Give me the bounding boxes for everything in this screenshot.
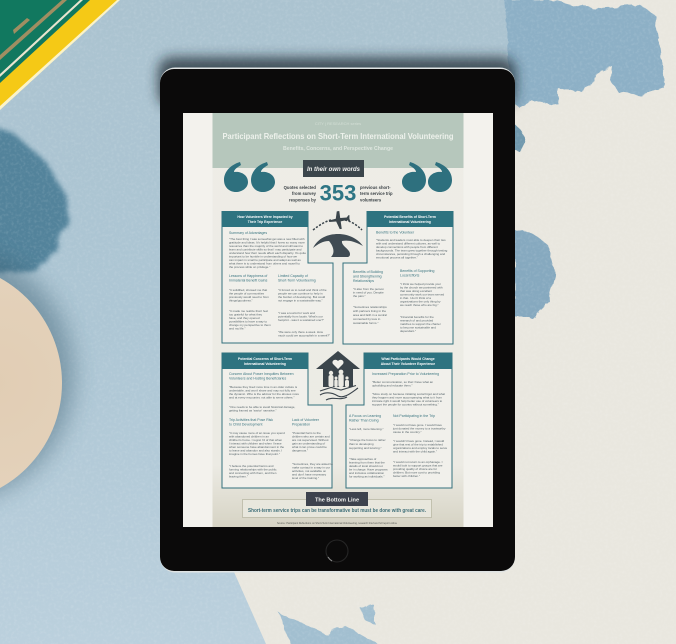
quotes: preparation: support the people for country without something." — [372, 402, 439, 406]
quotes: not participating: "I would not have gone. I would have — [393, 423, 442, 427]
plate shadow — [0, 249, 74, 501]
quote: advantages: the process while on privilege." — [229, 265, 270, 269]
panel: what participants would change — [346, 353, 452, 488]
quotes: learning: "Less left, more listening." — [349, 427, 383, 431]
quote: benefits to volunteer: circumstances, persisting through a challenging and — [376, 252, 445, 256]
subheading: not participating: Not Participating in the Trip — [393, 414, 435, 418]
quotes: not participating: give that rest of the trip to established — [393, 442, 443, 446]
quotes: learning: for working as individuals." — [349, 474, 384, 478]
subheading: lessons: Immaterial Benefit Gains — [229, 278, 268, 282]
arch — [313, 234, 363, 257]
quotes: limited capacity: footprint - was it a sustained one?" — [278, 318, 324, 322]
right caption: previous short- — [360, 185, 391, 190]
quotes: learning: and inclusive collaboration — [349, 471, 385, 475]
eyebrow: CITY | RESEARCH series — [315, 121, 361, 126]
quotes: lessons: possibilities to have a way to — [229, 320, 267, 324]
subheading: power inequities: Concern About Power Inequities Between — [229, 372, 294, 376]
quotes: relationships: "Sometimes relationships — [353, 305, 387, 309]
quotes: activities harm: to leave and abandon and also stands. I — [229, 448, 282, 452]
quotes: local efforts: research of and provided — [400, 318, 434, 322]
quotes: lessons: "It made me realize that I feel — [229, 309, 268, 313]
quotes: not participating: providing quality of choice are for — [393, 467, 437, 471]
quotes: relationships: in need of you. Despite — [353, 290, 384, 294]
quotes: activities harm: forming relationships with the public — [229, 468, 277, 472]
quotes: limited capacity: the burden of developing. But could — [278, 295, 326, 299]
quotes: relationships: sustainable forms." — [353, 321, 378, 325]
open hand — [320, 386, 358, 400]
right caption: term service trip — [360, 191, 393, 196]
subheading: lack of preparation: Preparation — [292, 422, 310, 426]
quotes: not participating: better with children." — [393, 474, 420, 478]
right caption: volunteers — [360, 198, 382, 202]
callout: the bottom line — [242, 492, 432, 518]
subheading: limited capacity: Limited Capacity of — [278, 274, 308, 278]
callout text: Short-term service trips can be transformative but must be done with great care. — [248, 508, 427, 514]
quotes: local efforts: we reach those who are big." — [400, 303, 439, 307]
quote: advantages: learn and contribute skills so that I may participate and — [229, 248, 302, 252]
quotes: activities harm: I interact with children and when I leave — [229, 442, 282, 446]
quotes: local efforts: to become sustainable and — [400, 326, 436, 330]
quote: benefits to volunteer: with and understand different cultures, as well to — [376, 242, 440, 246]
quotes: local efforts: in that. I don't think of a — [400, 296, 431, 300]
quotes: activities harm: and connecting with them, and then — [229, 471, 277, 475]
flight path — [313, 220, 362, 230]
quotes: learning: "Take approaches of — [349, 457, 376, 461]
quotes: local efforts: dependant." — [400, 329, 416, 333]
subheading: learning: Rather Than Doing — [349, 418, 379, 422]
quotes: lack of preparation: children who are certain and — [292, 434, 330, 438]
quotes: activities harm: leaving them." — [229, 474, 248, 478]
ceramic plate — [0, 263, 62, 503]
quotes: not participating: would look to support groups that are — [393, 464, 443, 468]
quotes: activities harm: "It may cause more of an issue you spend — [229, 431, 285, 435]
label: in their own words: In their own words — [307, 167, 361, 173]
quotes: learning: details of local should not — [349, 464, 383, 468]
quotes: lack of preparation: dangerous." — [292, 448, 308, 452]
panel header: What Participants Would Change — [381, 357, 435, 361]
panel header — [222, 353, 308, 369]
main title: Participant Reflections on Short-Term International Volunteering — [222, 132, 454, 141]
background: cream paper area — [234, 0, 676, 644]
quote: benefits to volunteer: backgrounds. The team grew together through testing — [376, 248, 448, 252]
quotes: not participating: "I would not return to an orphanage. I — [393, 460, 443, 464]
quotes: lessons: too grateful for what they — [229, 312, 263, 316]
quotes: activities harm: imagine in the homes have that point." — [229, 452, 280, 456]
subheading: local efforts: Local Efforts — [400, 274, 420, 278]
quote: benefits to volunteer: "Students and leaders must able to deepen their ties — [376, 238, 446, 242]
panel header: International Volunteering — [389, 220, 431, 224]
quotes: lack of preparation: and don't have necessary — [292, 472, 327, 476]
quotes: limited capacity: "I was a tourist for work and — [278, 311, 315, 315]
quote: advantages: can impact in small to participate and adapt as well as — [229, 258, 301, 262]
quotes: activities harm: with abandoned children in an — [229, 434, 269, 438]
panel: potential benefits — [343, 211, 453, 344]
quotes: local efforts: matches to support the charter — [400, 322, 441, 326]
subheading: learning: A Focus on Learning — [349, 414, 381, 418]
panel header: Potential Benefits of Short-Term — [384, 215, 436, 219]
quotes: not participating: "I wouldn't have gone. Instead, I would — [393, 439, 445, 443]
quotes: lack of preparation: activities, not available on — [292, 469, 327, 473]
left caption: from survey — [292, 191, 317, 196]
quotes: relationships: "It also from the person — [353, 287, 384, 291]
icon: house with family and hand — [316, 351, 360, 400]
header band — [212, 113, 464, 168]
quotes: lessons: have, and they opened — [229, 316, 260, 320]
home button — [326, 540, 348, 562]
quotes: local efforts: that was doing excellent — [400, 289, 432, 293]
panel header: About Their Volunteer Experience — [381, 362, 435, 366]
quotes: learning: learning from them that the — [349, 460, 385, 464]
quotes: lessons: previously would need to from — [229, 295, 269, 299]
quotes: not participating: and interact with the child again." — [393, 450, 437, 454]
number 353: 353 — [320, 180, 356, 206]
quotes: lessons: things/goodness." — [229, 298, 253, 302]
quotes: lack of preparation: are not supervised. Without — [292, 438, 329, 442]
quotes: learning: be in charge. Have programs — [349, 468, 388, 472]
left caption: Quotes selected — [284, 185, 316, 190]
subheading: preparation: Increased Preparation Prior to Volunteering — [372, 372, 439, 376]
airplane — [328, 210, 351, 230]
label: in their own words — [303, 160, 364, 177]
quotes: activities harm: when someone have abandonment in the — [229, 445, 284, 449]
quotes: power inequities: undeniable, and won't share and may not fully see — [229, 388, 296, 392]
quotes: preparation: they happen and more accompanying what to it from — [372, 396, 442, 400]
quotes: local efforts: community work our team served — [400, 292, 445, 296]
quotes: learning: than to developing — [349, 442, 374, 446]
quotes: preparation: upbuilding and educate them." — [372, 384, 412, 388]
watercolour blotch: right small — [514, 124, 525, 152]
quotes: local efforts: by the church we partnered with — [400, 286, 443, 290]
quotes: learning: supporting and tutoring." — [349, 446, 382, 450]
quote: advantages: resources than the majority of the world and still want to — [229, 244, 303, 248]
quotes: power inequities: "Because they lived more time in an older culture is — [229, 385, 298, 389]
tablet — [160, 68, 515, 572]
quote: advantages: "The best thing I was somewhat get was a new filled with — [229, 237, 305, 241]
watercolour blotch: bottom — [278, 612, 385, 644]
quotes: not participating: organizations and employ locals to serve — [393, 446, 448, 450]
quotes: activities harm: "I believe the potential harms and — [229, 464, 274, 468]
watercolour blotch: left dark — [0, 124, 68, 272]
quotes: limited capacity: "We were only there a week. How — [278, 330, 324, 334]
quotes: not participating: cause in the country." — [393, 430, 422, 434]
survey statistic — [284, 180, 393, 206]
quotes: power inequities: and at every encounter, not able to serve others." — [229, 396, 294, 400]
subheading: activities harm: to Child Development — [229, 422, 262, 426]
roof and walls — [316, 351, 360, 387]
quote: benefits to volunteer: develop connections with people from different — [376, 245, 438, 249]
subheading: relationships: Benefits of Building — [353, 270, 383, 274]
subtitle: Benefits, Concerns, and Perspective Change — [283, 146, 393, 152]
quotes: preparation: "Better communication, so that I have what an — [372, 380, 433, 384]
panel header: Potential Concerns of Short-Term — [238, 357, 292, 361]
watercolour blotch: right mid — [514, 230, 556, 318]
quotes: lessons: the people of communities — [229, 292, 265, 296]
subheading: benefits to volunteer: Benefits to the Volunteer — [376, 230, 415, 234]
watercolour blotch: bottom small — [361, 606, 375, 624]
quotes: relationships: connected by love in — [353, 317, 381, 321]
icon: opening quote marks — [224, 162, 275, 192]
subheading: lessons: Lessons of Happiness of — [229, 274, 267, 278]
panel header — [367, 211, 453, 227]
subheading: lack of preparation: Lack of Volunteer — [292, 418, 320, 422]
quote: advantages: gratitude and ideas. It's helpful that I knew so many more — [229, 240, 305, 244]
quotes: lessons: "It solidified, showed me that — [229, 288, 267, 292]
icon: closing quote marks — [402, 162, 452, 192]
panel: potential concerns — [222, 353, 334, 488]
subheading: relationships: and Strengthening — [353, 274, 382, 278]
quotes: relationships: the pain." — [353, 294, 366, 298]
panel header — [222, 211, 308, 227]
family figures — [328, 370, 349, 387]
quotes: power inequities: "One needs to be able to avoid historical damage, — [229, 405, 295, 409]
quote: advantages: important to be humble in understanding of how we — [229, 254, 297, 258]
quote: advantages: understand how their needs affect each disparity. It's quite — [229, 251, 306, 255]
quotes: local efforts: organizations the only thing by — [400, 300, 441, 304]
panel header: Their Trip Experience — [248, 220, 282, 224]
quotes: lack of preparation: level of the training." — [292, 476, 319, 480]
quotes: lessons: change my perspective to them — [229, 323, 271, 327]
quotes: activities harm: children's home. I regret I'd of that when — [229, 438, 283, 442]
subheading: relationships: Relationships — [353, 279, 374, 283]
subheading: summary of advantages: Summary of Advantages — [229, 231, 267, 235]
quotes: lack of preparation: what it can prove could be — [292, 445, 327, 449]
panel header: International Volunteering — [244, 362, 286, 366]
quotes: not participating: just donated the money to a trustworthy — [392, 426, 446, 430]
subheading: local efforts: Benefits of Supporting — [400, 269, 434, 273]
quotes: lack of preparation: make contact in a way in our — [292, 466, 330, 470]
quotes: power inequities: the dynamic. Who is the advisor for the abuses more — [229, 392, 299, 396]
book corner: green cover with yellow band — [0, 0, 120, 110]
quotes: preparation: "More study on because initiating social bigot and what — [372, 392, 445, 396]
subheading: power inequities: Volunteers and Hosting Beneficiaries — [229, 376, 286, 380]
quotes: limited capacity: potentially from locals. What's our — [278, 314, 323, 318]
quotes: power inequities: getting framed as 'savior' narrative." — [229, 408, 277, 412]
quote: advantages: what there is to understand from others and myself to — [229, 262, 300, 266]
footer credit: Source: Participant Reflections on Short-Term International Volunteering, research brief and full report online — [277, 522, 398, 525]
quotes: local efforts: "I think we helped provide your — [400, 282, 441, 286]
subheading: activities harm: Trip Activities that Pose Risk — [229, 418, 273, 422]
panel: how volunteers were impacted — [222, 211, 333, 343]
quotes: relationships: with partners living in the — [353, 309, 386, 313]
quotes: limited capacity: "It forced us to recall and think of the — [278, 288, 327, 292]
quotes: limited capacity: not engage in a sustainable way." — [278, 298, 323, 302]
heart — [332, 360, 344, 369]
quotes: learning: "Change the focus to rather — [349, 438, 386, 442]
tablet shadow — [158, 57, 516, 107]
quotes: limited capacity: much could we accomplish in a week?" — [278, 334, 330, 338]
watercolour blotch: top right — [505, 0, 664, 108]
quotes: local efforts: "Financial benefits for the — [400, 315, 434, 319]
panel header: How Volunteers Were Impacted by — [237, 215, 293, 219]
quotes: lack of preparation: gain an understanding of — [292, 442, 325, 446]
quotes: lessons: and my life." — [229, 326, 245, 330]
icon: airplane over bridge arch — [313, 210, 363, 257]
quotes: not participating: children. But more cost to providing — [393, 470, 440, 474]
quotes: limited capacity: people we can continue to help in — [278, 292, 323, 296]
quote: benefits to volunteer: emotional process all together." — [376, 256, 418, 260]
quotes: lack of preparation: "Sometimes, they are asked to — [292, 462, 333, 466]
subheading: limited capacity: Short-Term Volunteering — [278, 278, 316, 282]
screen — [183, 113, 493, 527]
left caption: responses by — [289, 198, 317, 202]
callout heading — [306, 492, 368, 506]
quotes: preparation: intricate right it would help better use of volunteers to — [372, 399, 443, 403]
panel header — [364, 353, 452, 369]
quotes: lack of preparation: "Potential harm to the — [292, 431, 321, 435]
quotes: relationships: area and faith in a central — [353, 313, 387, 317]
callout heading: The Bottom Line — [315, 498, 359, 504]
